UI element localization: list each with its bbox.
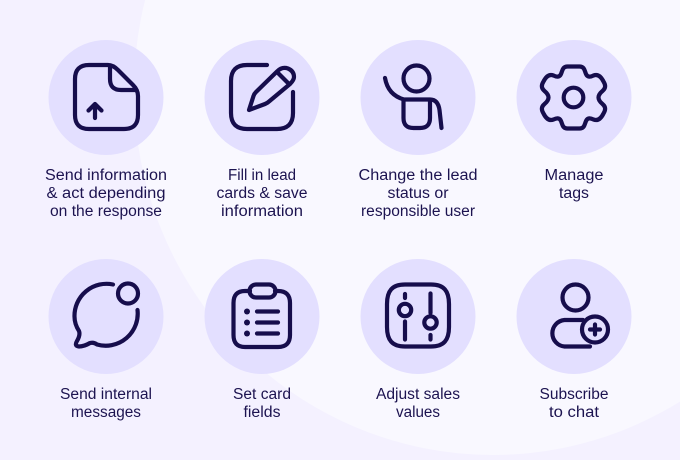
label: fill in lead cards: information <box>221 203 303 220</box>
label: send information: on the response <box>50 203 162 220</box>
panel: change lead status <box>358 40 478 220</box>
label: manage tags: Manage <box>544 167 604 184</box>
label: set card fields: fields <box>244 404 281 421</box>
label: fill in lead cards: cards & save <box>216 185 308 202</box>
label: adjust sales values: Adjust sales <box>376 386 460 403</box>
label: send internal messages: messages <box>71 404 141 421</box>
panel: set card fields <box>204 259 320 421</box>
label: subscribe to chat: Subscribe <box>540 386 608 403</box>
label: change lead status: Change the lead <box>358 167 478 184</box>
label: change lead status: status or <box>388 185 448 202</box>
icon: person waving <box>360 40 476 155</box>
icon: document with upload arrow <box>48 40 164 155</box>
icon: sliders in rounded square <box>360 259 476 374</box>
icon: clipboard <box>204 259 320 374</box>
label: fill in lead cards: Fill in lead <box>228 167 296 184</box>
label: send internal messages: Send internal <box>60 386 152 403</box>
icon: pencil in square <box>204 40 320 155</box>
panel: adjust sales values <box>360 259 476 421</box>
label: set card fields: Set card <box>233 386 291 403</box>
label: manage tags: tags <box>559 185 589 202</box>
icon: gear <box>516 40 632 155</box>
panel: fill in lead cards <box>204 40 320 220</box>
icon: user with plus badge <box>516 259 632 374</box>
icon: chat bubble with notification dot <box>48 259 164 374</box>
panel: subscribe to chat <box>516 259 632 421</box>
label: change lead status: responsible user <box>361 203 475 220</box>
label: subscribe to chat: to chat <box>549 404 600 421</box>
panel: send information <box>45 40 167 220</box>
label: send information: & act depending <box>46 185 166 202</box>
label: send information: Send information <box>45 167 167 184</box>
label: adjust sales values: values <box>396 404 440 421</box>
panel: send internal messages <box>48 259 164 421</box>
panel: manage tags <box>516 40 632 202</box>
